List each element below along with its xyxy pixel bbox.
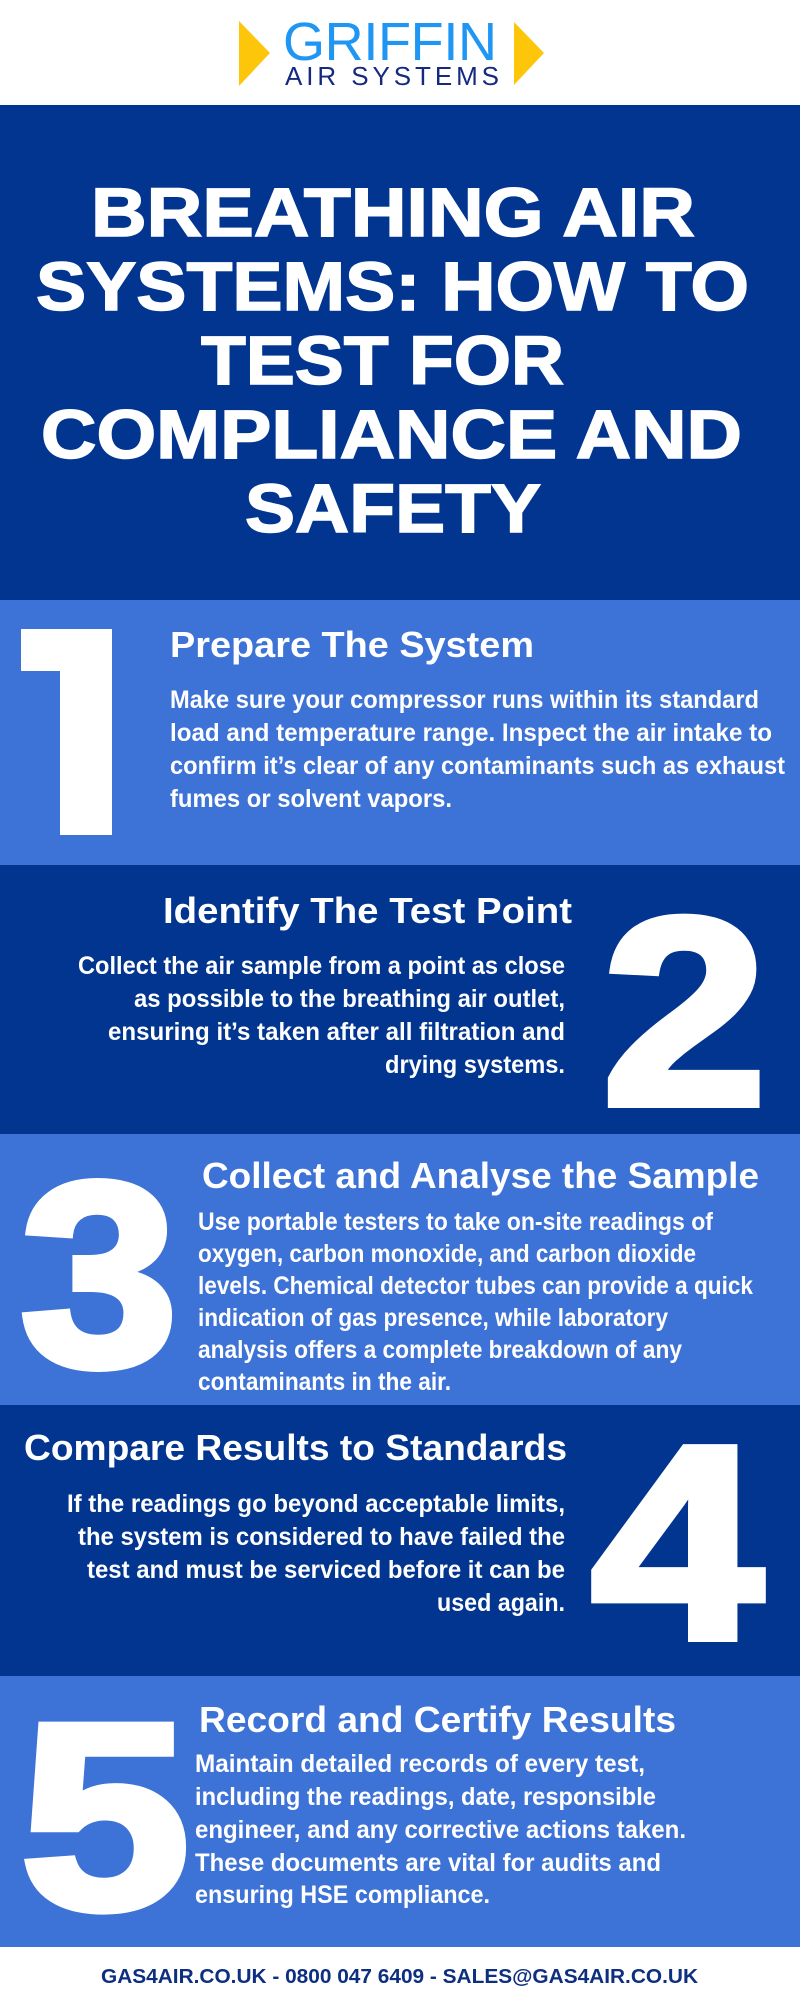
panel: step 5: [0, 1669, 800, 1965]
body text: Collect the air sample from a point as close: [78, 952, 565, 980]
body text: Make sure your compressor runs within its standard: [170, 686, 759, 714]
heading: Record and Certify Results: Record and Certify Results: [199, 1699, 676, 1740]
panel: step 1: [0, 600, 800, 865]
body text: load and temperature range. Inspect the air intake to: [170, 719, 772, 747]
title: SAFETY: [245, 470, 541, 547]
body text: Use portable testers to take on-site readings of: [198, 1208, 714, 1236]
title: SYSTEMS: HOW TO: [36, 248, 749, 325]
body text: drying systems.: [385, 1051, 565, 1079]
number 1: 1: [0, 577, 168, 892]
panel: step 3: [0, 1128, 800, 1421]
number 4: 4: [591, 1389, 765, 1697]
body text: engineer, and any corrective actions taken.: [195, 1816, 686, 1844]
title: COMPLIANCE AND: [41, 396, 742, 473]
heading: Identify The Test Point: Identify The Test Point: [163, 890, 572, 931]
body text: Maintain detailed records of every test,: [195, 1750, 645, 1778]
body text: ensuring it’s taken after all filtration and: [108, 1018, 565, 1046]
heading: Collect and Analyse the Sample: Collect and Analyse the Sample: [202, 1155, 759, 1196]
heading: Compare Results to Standards: Compare Results to Standards: [24, 1427, 567, 1468]
logo wordmark: Air Systems: AIR SYSTEMS: [285, 61, 499, 91]
body text: fumes or solvent vapors.: [170, 785, 452, 813]
body text: [195, 1750, 686, 1909]
title: TEST FOR: [201, 322, 564, 399]
body text: indication of gas presence, while laboratory: [198, 1304, 668, 1332]
body text: levels. Chemical detector tubes can provide a quick: [198, 1272, 753, 1300]
body text: contaminants in the air.: [198, 1368, 451, 1396]
logo wordmark: Griffin: GRIFFIN: [283, 12, 497, 72]
body text: oxygen, carbon monoxide, and carbon dioxide: [198, 1240, 696, 1268]
body text: test and must be serviced before it can be: [87, 1556, 565, 1584]
number 5: 5: [20, 1669, 190, 1965]
body text: the system is considered to have failed the: [78, 1523, 565, 1551]
number 2: 2: [602, 862, 767, 1161]
body text: [78, 952, 565, 1079]
logo: [239, 12, 544, 91]
icon: left arrow: [239, 21, 270, 86]
body text: used again.: [437, 1589, 565, 1617]
body text: including the readings, date, responsible: [195, 1783, 656, 1811]
body text: analysis offers a complete breakdown of any: [198, 1336, 682, 1364]
body text: ensuring HSE compliance.: [195, 1881, 490, 1909]
body text: [198, 1208, 753, 1396]
panel: step 4: [0, 1389, 800, 1697]
number 3: 3: [20, 1128, 178, 1421]
body text: as possible to the breathing air outlet,: [134, 985, 565, 1013]
body text: These documents are vital for audits and: [195, 1849, 661, 1877]
heading: Prepare The System: Prepare The System: [170, 624, 534, 665]
body text: [67, 1490, 565, 1617]
body text: If the readings go beyond acceptable limits,: [67, 1490, 565, 1518]
title: BREATHING AIR: [91, 174, 695, 251]
panel: title: [0, 105, 800, 600]
footer contact line: GAS4AIR.CO.UK - 0800 047 6409 - SALES@GAS4AIR.CO.UK: [101, 1966, 699, 1988]
panel: step 2: [0, 862, 800, 1161]
body text: [170, 686, 786, 813]
icon: right arrow: [514, 22, 544, 85]
title: [36, 174, 749, 547]
